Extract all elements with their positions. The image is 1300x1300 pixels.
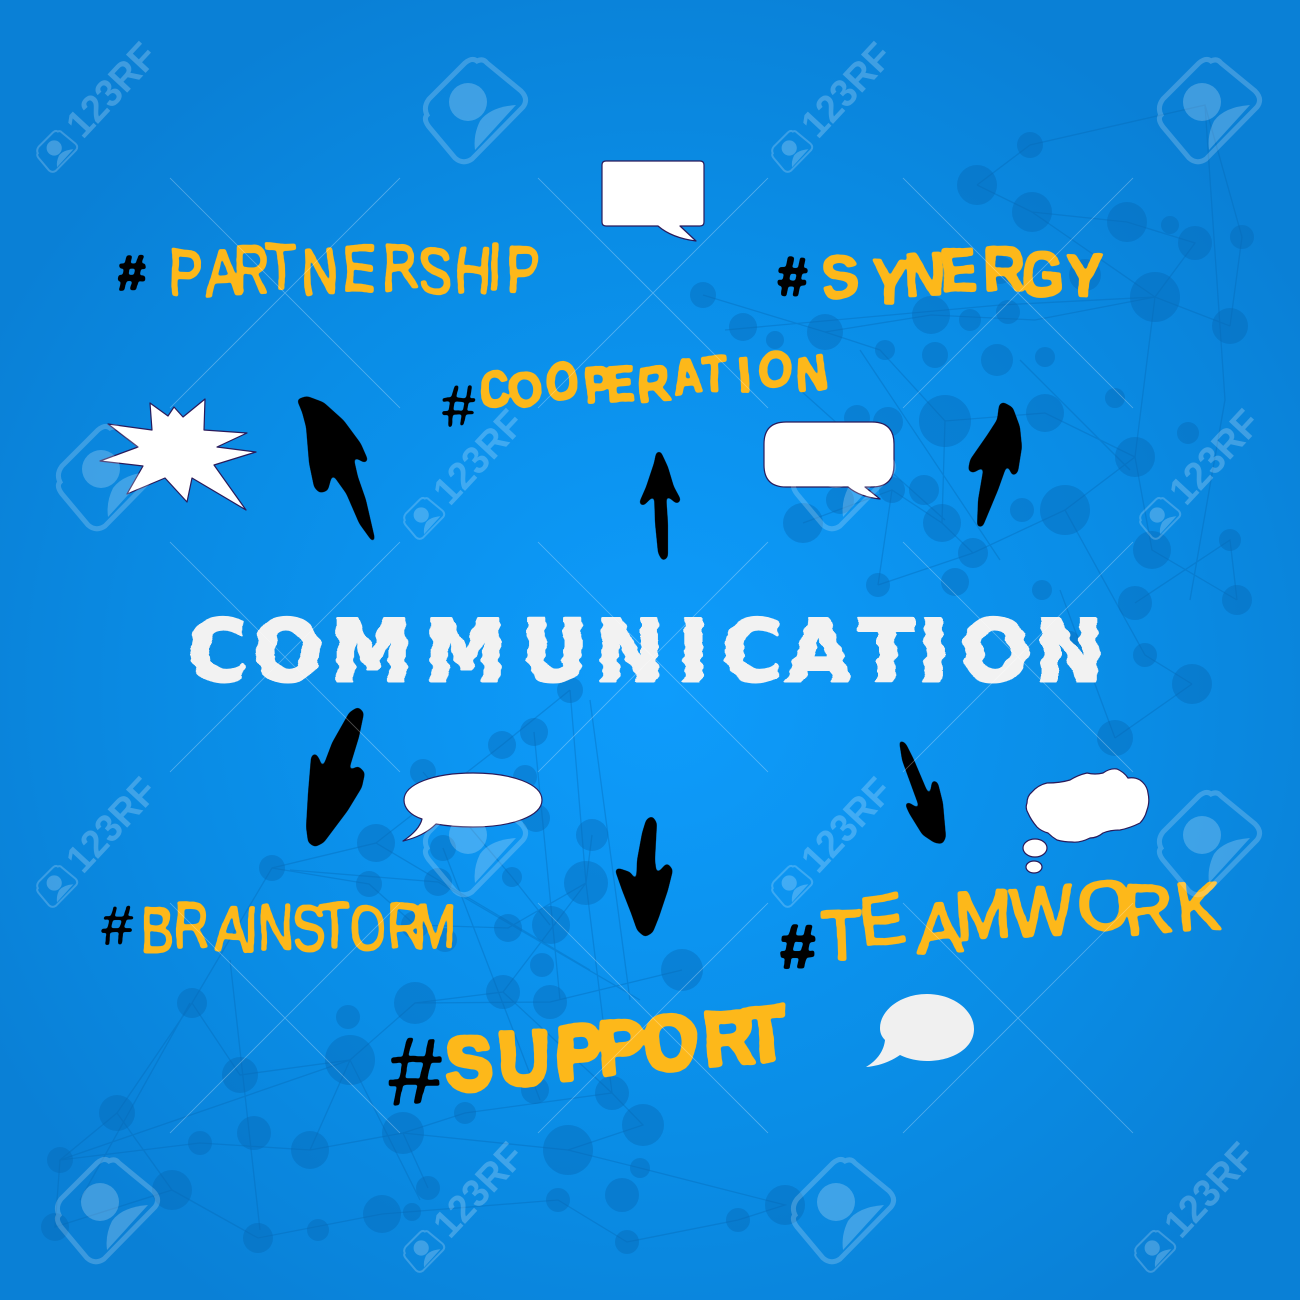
arrow: to cooperation bbox=[640, 452, 680, 560]
watermarks: 123RF bbox=[425, 1135, 533, 1246]
label: teamwork: # bbox=[781, 912, 815, 981]
molecule network: lower left bbox=[41, 677, 805, 1254]
watermarks: 123RF bbox=[425, 402, 533, 513]
label: cooperation: # bbox=[441, 373, 477, 440]
title: COMMUNICATION bbox=[187, 601, 1104, 702]
speech bubble: grey oval bbox=[866, 994, 974, 1067]
label: support: # bbox=[388, 1018, 441, 1125]
thought bubble bbox=[1023, 769, 1149, 873]
molecule network: upper right bbox=[690, 105, 1254, 756]
arrow: to support bbox=[616, 817, 672, 936]
watermarks: 123RF bbox=[793, 770, 901, 881]
label: brainstorm: # bbox=[102, 893, 133, 956]
label: support: SUPPORT bbox=[444, 991, 791, 1107]
watermarks: 123RF bbox=[793, 35, 901, 146]
arrow: to brainstorm bbox=[307, 708, 364, 846]
watermarks: 123RF bbox=[58, 770, 166, 881]
label: partnership: PARTNERSHIP bbox=[168, 230, 541, 311]
watermarks: 123RF bbox=[1161, 402, 1269, 513]
label: teamwork: TEAMWORK bbox=[819, 864, 1224, 975]
speech bubble: starburst bbox=[100, 399, 256, 510]
label: synergy: SYNERGY bbox=[820, 235, 1104, 317]
label: cooperation: COOPERATION bbox=[478, 340, 829, 419]
label: synergy: # bbox=[778, 247, 808, 307]
speech bubble: oval bbox=[403, 773, 542, 841]
label: brainstorm: BRAINSTORM bbox=[141, 890, 456, 966]
speech bubble: rectangle top bbox=[602, 161, 704, 241]
label: partnership: # bbox=[118, 245, 146, 301]
arrow: to synergy bbox=[969, 403, 1021, 526]
speech bubble: rounded right bbox=[764, 422, 894, 499]
watermarks: 123RF bbox=[1156, 1135, 1264, 1246]
arrow: to partnership bbox=[298, 397, 374, 541]
arrow: to teamwork bbox=[900, 741, 945, 843]
watermarks: 123RF bbox=[58, 35, 166, 146]
